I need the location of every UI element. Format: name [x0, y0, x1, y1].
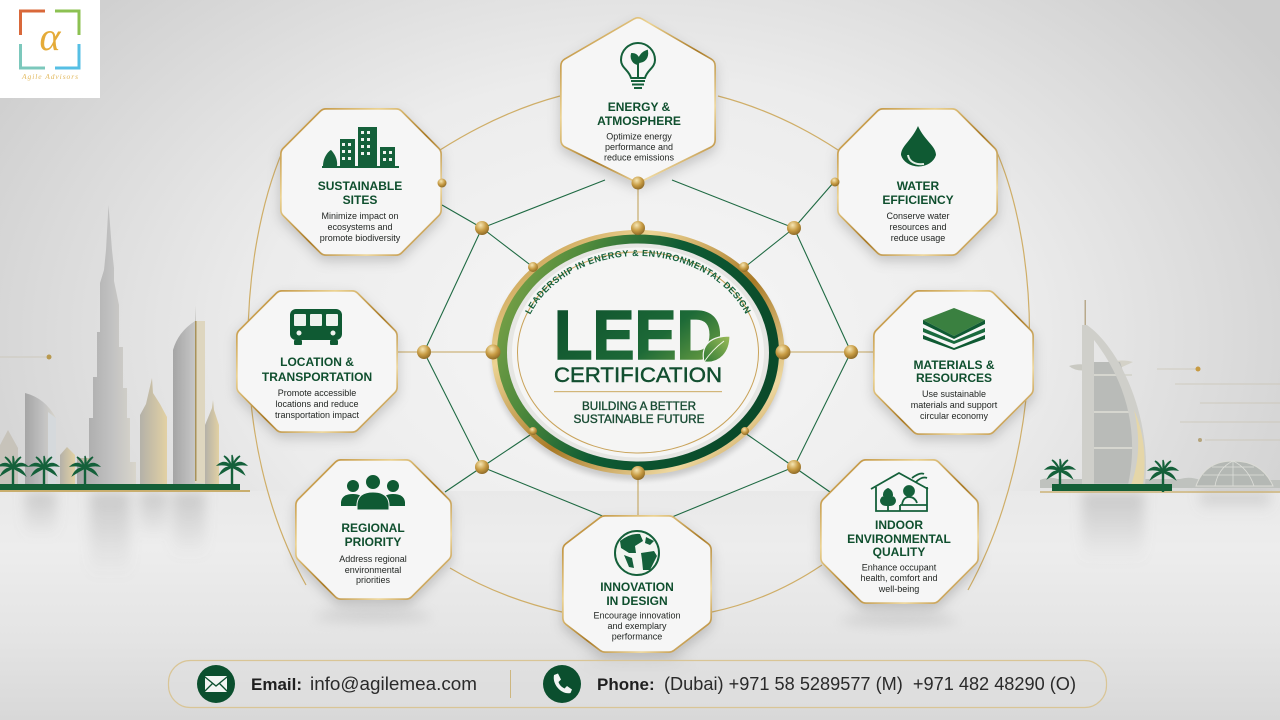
panel: energy and atmosphere: Optimize energy: [606, 132, 672, 142]
panel: water efficiency: WATER: [897, 179, 940, 193]
panel: water efficiency: resources and: [889, 222, 947, 232]
panel: materials and resources: Use sustainable: [922, 389, 986, 399]
panel: water efficiency: EFFICIENCY: [882, 193, 954, 207]
panel: sustainable sites: SITES: [343, 193, 377, 207]
icon: globe: [615, 531, 659, 575]
logo: Agile Advisors: [21, 72, 78, 81]
network connectors: [398, 180, 873, 517]
curved heading: LEADERSHIP IN ENERGY & ENVIRONMENTAL DESIGN: [525, 250, 751, 314]
panel: materials and resources: [882, 299, 1025, 426]
panel: materials and resources: materials and support: [911, 400, 998, 410]
icon: water drop: [901, 126, 936, 166]
panel: indoor environmental quality: INDOOR: [875, 518, 923, 532]
LEED title: LEED: [554, 296, 722, 374]
phone numbers: (Dubai) +971 58 5289577 (M) +971 482 48290 (O): [664, 674, 1076, 694]
panel: indoor environmental quality: Enhance occupant: [862, 562, 937, 572]
network nodes: [417, 176, 858, 480]
contact bar: [168, 660, 1106, 708]
panel: sustainable sites: SUSTAINABLE: [318, 179, 402, 193]
panel: water efficiency: reduce usage: [891, 233, 945, 243]
panel: innovation in design: Encourage innovation: [593, 610, 681, 620]
panel: regional priority: PRIORITY: [345, 535, 401, 549]
panel: location and transportation: LOCATION &: [280, 355, 354, 369]
panel: sustainable sites: promote biodiversity: [320, 233, 401, 243]
panel: indoor environmental quality: QUALITY: [873, 545, 925, 559]
icon: light bulb with leaves: [621, 43, 655, 88]
panel: energy and atmosphere: performance and: [605, 142, 673, 152]
icon: email: [197, 665, 235, 703]
center badge: SUSTAINABLE FUTURE: [574, 414, 705, 426]
panel: energy and atmosphere: reduce emissions: [604, 152, 675, 162]
panel: energy and atmosphere: ATMOSPHERE: [597, 114, 681, 128]
email label: Email:: [251, 675, 302, 694]
skyline reflection: [25, 492, 1270, 577]
panel: location and transportation: locations and reduce: [275, 399, 359, 409]
panel: innovation in design: IN DESIGN: [606, 594, 668, 608]
icon: house with plant and person: [871, 473, 928, 511]
panel: indoor environmental quality: ENVIRONMENTAL: [847, 532, 951, 546]
panel: energy and atmosphere: ENERGY &: [608, 100, 671, 114]
panel: indoor environmental quality: well-being: [878, 584, 919, 594]
panel: innovation in design: performance: [612, 632, 662, 642]
email address: info@agilemea.com: [310, 674, 477, 694]
card floor shadows: [315, 610, 957, 668]
panel: energy and atmosphere: [569, 26, 707, 174]
panel: location and transportation: TRANSPORTATION: [262, 370, 372, 384]
burj tower: [77, 205, 136, 485]
panel: regional priority: environmental: [345, 565, 401, 575]
icon: leaf: [703, 336, 730, 362]
icon: green buildings: [322, 127, 399, 168]
panel: materials and resources: MATERIALS &: [913, 358, 995, 372]
icon: phone: [543, 665, 581, 703]
panel: location and transportation: [245, 299, 389, 424]
panel: water efficiency: Conserve water: [886, 211, 950, 221]
panel: materials and resources: circular economy: [920, 411, 989, 421]
outer gold orbit: [248, 96, 1029, 612]
logo: α: [40, 14, 62, 59]
icon: group of people: [341, 474, 405, 510]
panel: location and transportation: transportation impact: [275, 410, 360, 420]
dome: [1196, 461, 1273, 486]
right skyline: [1040, 300, 1280, 493]
panel: sustainable sites: [289, 117, 433, 247]
panel: regional priority: priorities: [356, 575, 391, 585]
panel: regional priority: Address regional: [339, 554, 407, 564]
panel: sustainable sites: Minimize impact on: [321, 211, 399, 221]
burj al arab: [1084, 300, 1086, 325]
panel: sustainable sites: ecosystems and: [327, 222, 393, 232]
tagline: BUILDING A BETTER: [582, 401, 696, 413]
panel: water efficiency: [846, 117, 989, 247]
panel: materials and resources: RESOURCES: [916, 371, 992, 385]
panel: indoor environmental quality: health, comfort and: [860, 573, 938, 583]
panel: location and transportation: Promote accessible: [278, 388, 356, 398]
phone label: Phone:: [597, 675, 655, 694]
panel: regional priority: [304, 468, 443, 591]
center badge: [490, 230, 786, 482]
panel: regional priority: REGIONAL: [341, 521, 405, 535]
palms left: [0, 455, 246, 488]
faint background streaks: [0, 354, 1280, 442]
logo: [0, 0, 100, 98]
panel: indoor environmental quality: [829, 468, 970, 595]
panel: innovation in design: and exemplary: [607, 621, 667, 631]
icon: stacked layers: [923, 308, 985, 350]
icon: bus: [290, 309, 342, 345]
panel: innovation in design: INNOVATION: [600, 580, 674, 594]
left skyline: [0, 205, 250, 492]
certification subtitle: CERTIFICATION: [554, 364, 722, 387]
panel: innovation in design: [571, 524, 703, 644]
